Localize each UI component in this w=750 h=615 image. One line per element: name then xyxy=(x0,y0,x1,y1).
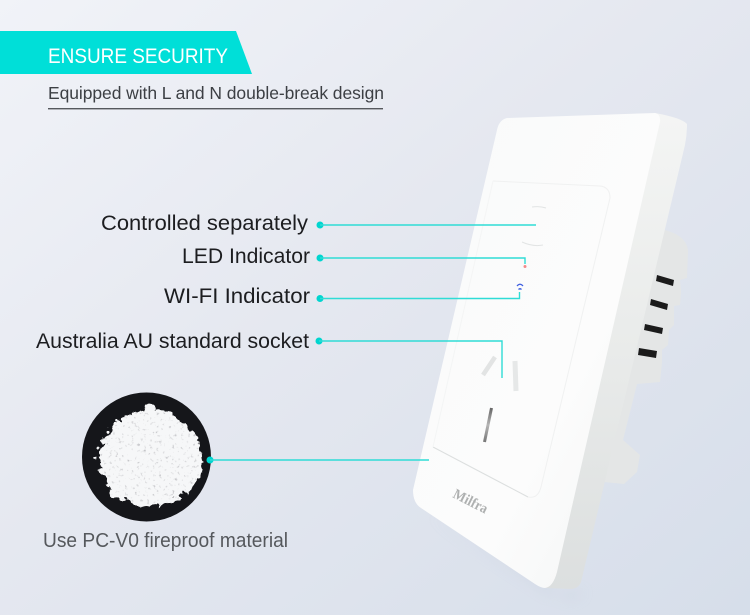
socket pin slots xyxy=(483,357,516,442)
plate front face xyxy=(413,113,660,588)
callout: LED indicator xyxy=(182,244,526,268)
callout: WI-FI indicator: WI-FI Indicator xyxy=(164,284,310,308)
plate shadow xyxy=(430,515,585,600)
callout: WI-FI indicator xyxy=(164,284,523,308)
plate side edge xyxy=(545,113,687,589)
back housing xyxy=(604,229,688,484)
callout: LED indicator: LED Indicator xyxy=(182,244,310,268)
banner: ensure security xyxy=(0,31,252,74)
subtitle: Equipped with L and N double-break design xyxy=(48,83,384,103)
callout: controlled separately xyxy=(101,211,536,235)
banner: ensure security: ENSURE SECURITY xyxy=(48,45,228,68)
callout: controlled separately: Controlled separately xyxy=(101,211,308,235)
caption: fireproof material: Use PC-V0 fireproof material xyxy=(43,530,288,552)
terminal slots xyxy=(638,275,674,358)
callout: material line xyxy=(206,456,429,464)
callout: australia AU standard socket xyxy=(36,329,502,378)
brand logo: Milfra xyxy=(450,486,491,518)
callout: australia AU standard socket: Australia AU standard socket xyxy=(36,329,309,353)
inner panel outline xyxy=(433,181,610,497)
material sample: white granules in a dark circle xyxy=(82,392,211,522)
switch button marks xyxy=(522,207,546,246)
product: smart wall socket xyxy=(413,113,688,600)
